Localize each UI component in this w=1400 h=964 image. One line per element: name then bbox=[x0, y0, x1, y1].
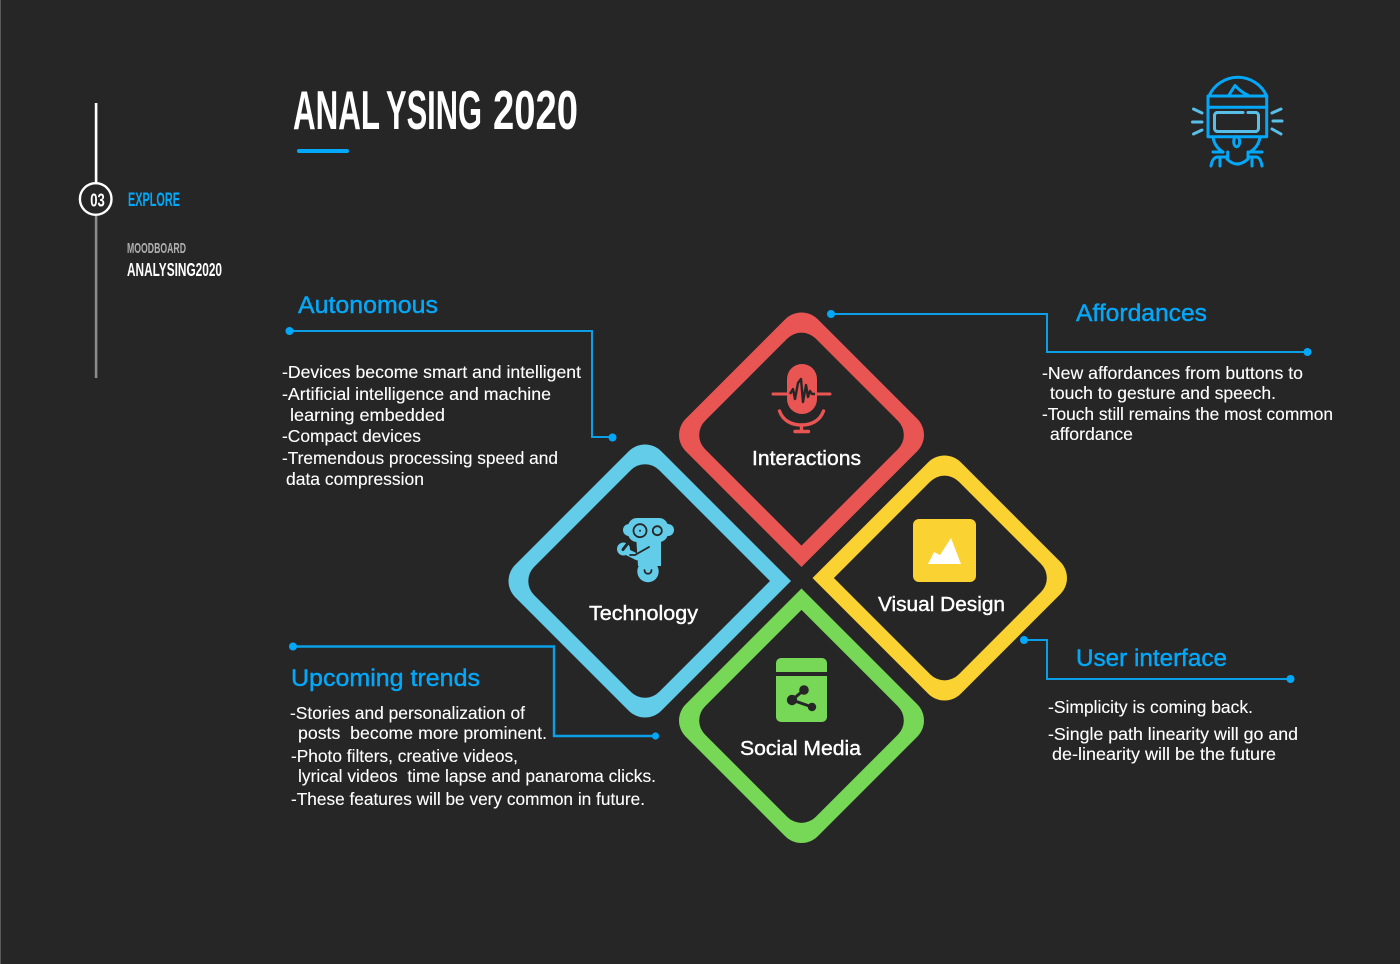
text block: upcoming trends: -These features will be very common in future. bbox=[291, 789, 645, 809]
text block: autonomous: -Artificial intelligence and machine bbox=[282, 384, 551, 404]
text block: affordances: -Touch still remains the most common bbox=[1042, 404, 1333, 424]
panel: technology diamond bbox=[509, 445, 791, 717]
text block: upcoming trends: lyrical videos time lapse and panaroma clicks. bbox=[298, 766, 656, 786]
panel: interactions diamond bbox=[679, 313, 924, 567]
text block: autonomous: data compression bbox=[286, 469, 424, 489]
icon: image tile bbox=[913, 519, 976, 582]
panel: visual design diamond bbox=[812, 456, 1067, 700]
text block: autonomous: -Compact devices bbox=[282, 426, 421, 446]
text block: user interface bbox=[1048, 697, 1298, 764]
text block: autonomous bbox=[282, 362, 581, 489]
text block: user interface: -Single path linearity will go and bbox=[1048, 724, 1298, 744]
text block: autonomous: learning embedded bbox=[290, 405, 445, 425]
heading: upcoming trends: Upcoming trends bbox=[291, 665, 480, 692]
section label: explore: EXPLORE bbox=[128, 190, 180, 211]
step number circle bbox=[80, 183, 111, 215]
connector: affordances bbox=[827, 310, 1312, 356]
text block: affordances: -New affordances from buttons to bbox=[1042, 363, 1303, 383]
icon: microphone bbox=[773, 364, 830, 432]
heading: autonomous: Autonomous bbox=[298, 292, 438, 319]
text block: user interface: de-linearity will be the future bbox=[1052, 744, 1276, 764]
title: YSING bbox=[386, 79, 482, 141]
title underline bbox=[297, 149, 349, 153]
text block: upcoming trends: -Stories and personalization of bbox=[290, 703, 525, 723]
title: 2020 bbox=[493, 79, 578, 141]
icon: share card bbox=[776, 658, 827, 722]
connector: autonomous bbox=[286, 327, 616, 442]
text block: affordances: touch to gesture and speech. bbox=[1050, 383, 1276, 403]
heading: user interface: User interface bbox=[1076, 645, 1227, 672]
text block: autonomous: -Devices become smart and intelligent bbox=[282, 362, 581, 382]
callout: affordances bbox=[827, 300, 1333, 444]
text block: upcoming trends: posts become more prominent. bbox=[298, 723, 547, 743]
text block: autonomous: -Tremendous processing speed and bbox=[282, 448, 558, 468]
icon: VR headset person bbox=[1192, 77, 1282, 166]
text block: user interface: -Simplicity is coming back. bbox=[1048, 697, 1253, 717]
label: technology: Technology bbox=[589, 602, 699, 625]
callout: autonomous bbox=[282, 292, 616, 489]
title: ANAL bbox=[293, 79, 380, 141]
callout: upcoming trends bbox=[289, 642, 659, 809]
sidebar item: moodboard: MOODBOARD bbox=[127, 240, 186, 257]
text block: affordances: affordance bbox=[1050, 424, 1133, 444]
sidebar navigation bbox=[80, 103, 222, 378]
step number circle: 03 bbox=[90, 190, 105, 210]
text block: upcoming trends bbox=[290, 703, 656, 809]
callout: user interface bbox=[1020, 636, 1298, 764]
panel: social media diamond bbox=[679, 588, 924, 843]
label: visual design: Visual Design bbox=[878, 593, 1005, 616]
label: interactions: Interactions bbox=[752, 447, 861, 470]
text block: affordances bbox=[1042, 363, 1333, 444]
connector: user interface bbox=[1020, 636, 1294, 683]
sidebar item: analysing 2020: ANALYSING2020 bbox=[127, 260, 222, 280]
heading: affordances: Affordances bbox=[1076, 300, 1207, 327]
label: social media: Social Media bbox=[740, 737, 862, 760]
connector: upcoming trends bbox=[289, 642, 659, 740]
icon: robot bbox=[617, 518, 674, 582]
text block: upcoming trends: -Photo filters, creative videos, bbox=[291, 746, 518, 766]
